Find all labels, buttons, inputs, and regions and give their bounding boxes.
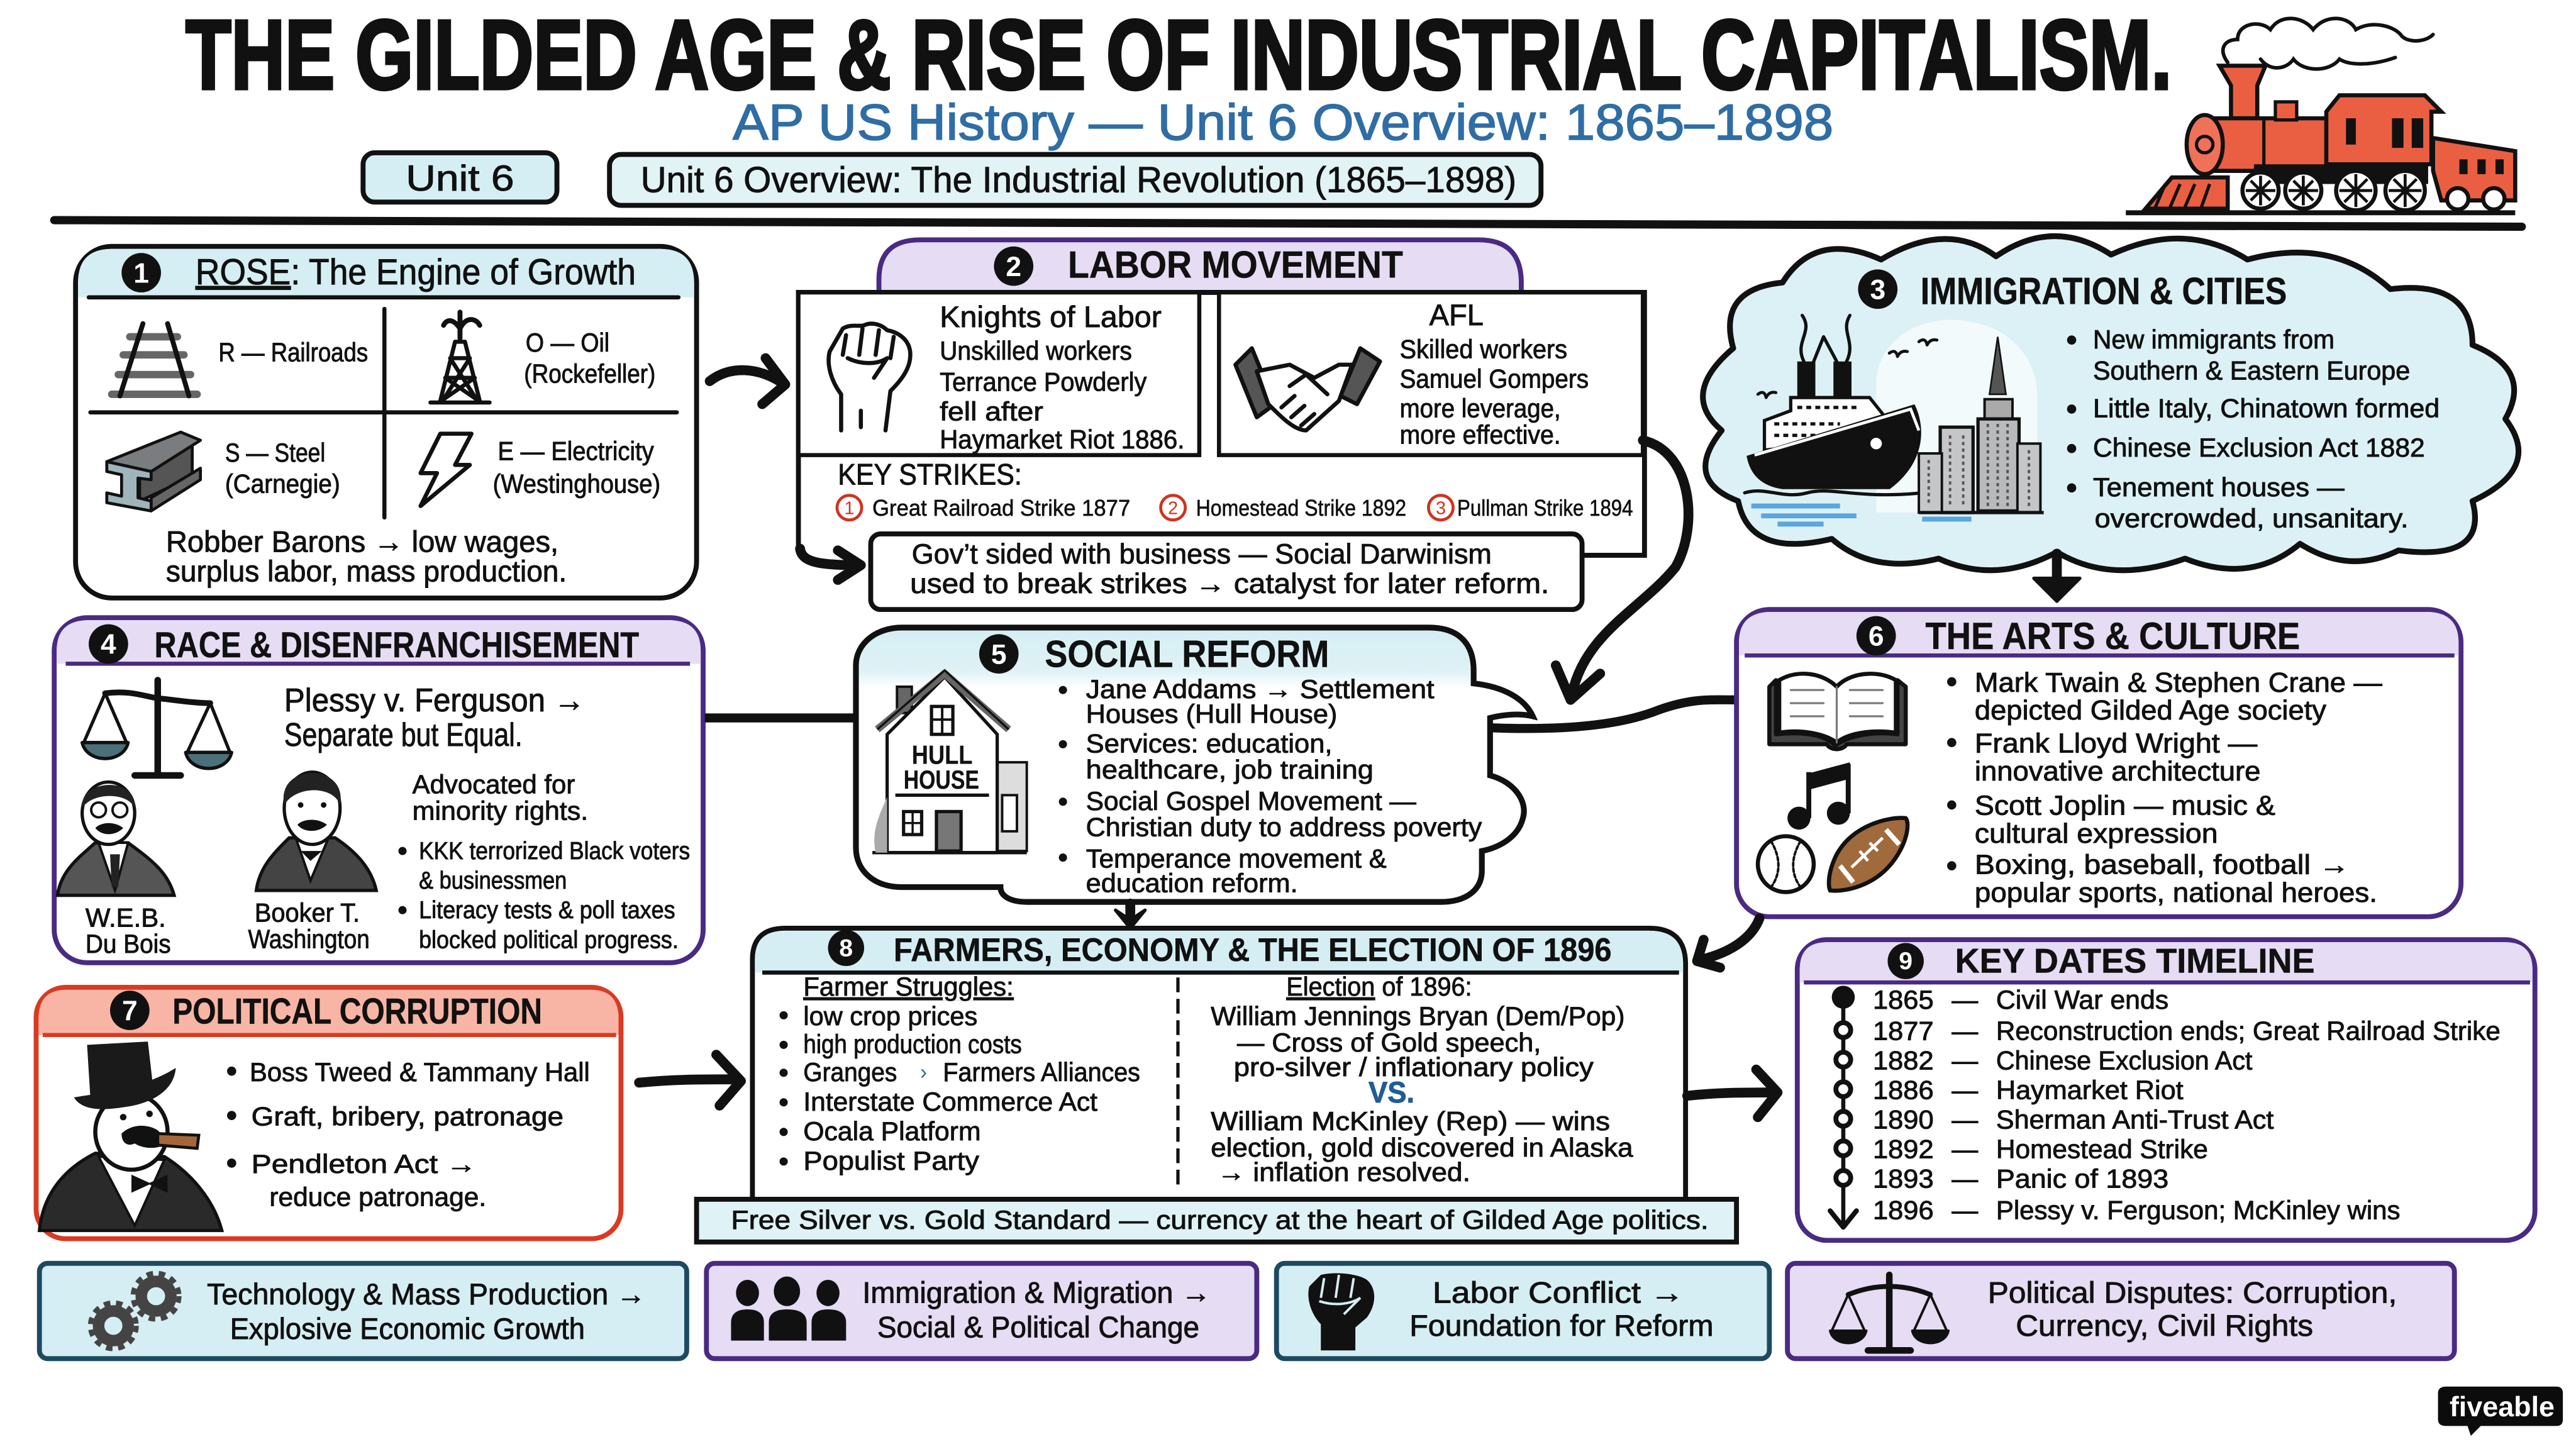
icon: Hull House: HOUSE [904,765,979,794]
panel 8: farmers, economy & election [752,928,1685,1208]
takeaway text [207,1277,646,1345]
arrow: labor box to callout [800,548,861,580]
advocated text: Advocated for [413,770,575,799]
election of 1896 column: election, gold discovered in Alaska [1211,1133,1633,1162]
badge 1 [121,253,161,292]
icon: oil derrick [430,312,489,402]
election of 1896 column: Election of 1896: [1286,972,1472,1001]
takeaway text: Currency, Civil Rights [2016,1309,2313,1342]
arts bullets: Mark Twain & Stephen Crane — [1975,668,2383,698]
election of 1896 column [1211,972,1633,1187]
heading: RACE & DISENFRANCHISEMENT [155,625,639,665]
arts bullets: Frank Lloyd Wright — [1975,728,2258,758]
election of 1896 column: — Cross of Gold speech, [1237,1028,1541,1057]
farmer struggles column: high production costs [803,1029,1022,1058]
icon: lightning bolt [421,434,472,506]
arts bullets: Boxing, baseball, football → [1975,850,2350,880]
plessy text: Plessy v. Ferguson → [284,682,585,719]
banner: free silver vs. gold [697,1199,1736,1242]
panel 2: labor movement [799,240,1645,609]
badge 2: 2 [1006,252,1021,282]
social reform bullets: healthcare, job training [1086,755,1374,784]
icon: railroad track [112,324,197,396]
takeaway: technology [40,1263,687,1358]
farmer struggles column [780,972,1140,1175]
icon: football [1829,818,1907,891]
knights of labor box [799,292,1199,455]
government callout: Gov’t sided with business — Social Darwinism [912,539,1492,570]
heading: LABOR MOVEMENT [1068,243,1403,286]
tag: unit overview: Unit 6 Overview: The Industrial Revolution (1865–1898) [641,160,1516,201]
header band [755,931,1683,972]
timeline entries [1873,985,2501,1224]
takeaway text: Foundation for Reform [1409,1309,1714,1342]
corruption bullets [227,1057,590,1211]
fiveable logo: fiveable [2450,1392,2555,1423]
heading: KEY DATES TIMELINE [1955,941,2315,980]
arts bullets: Scott Joplin — music & [1975,791,2275,821]
illustration: ship and skyline [1745,316,2044,524]
plessy text [284,682,585,753]
immigration bullets [2067,325,2440,533]
caption: W.E.B. Du Bois: W.E.B. [86,902,166,932]
timeline entries: — [1951,1016,1978,1046]
takeaway text: Social & Political Change [877,1310,1199,1343]
E electricity: (Westinghouse) [493,469,660,499]
badge 7: 7 [122,996,138,1026]
caption: W.E.B. Du Bois [86,902,171,958]
government callout [870,534,1582,609]
election of 1896 column: William Jennings Bryan (Dem/Pop) [1211,1001,1625,1031]
timeline entries: — [1951,1046,1978,1075]
badge 1: 1 [133,258,149,289]
arrow: farmers to timeline [1687,1070,1777,1117]
panel 6: arts & culture [1736,609,2461,917]
S steel [225,438,340,499]
farmer struggles column: › [920,1060,927,1084]
icon: scales of justice [82,680,231,775]
panel 9: key dates timeline [1797,940,2535,1240]
header tab [879,240,1521,292]
takeaway text: Labor Conflict → [1433,1276,1684,1309]
key strikes: Homestead Strike 1892 [1196,495,1406,521]
corruption bullets: reduce patronage. [269,1182,486,1211]
timeline entries: — [1951,1135,1978,1164]
robber barons text: Robber Barons → low wages, [166,525,558,558]
S steel: S — Steel [225,438,325,467]
icon: Boss Tweed caricature [40,1041,222,1231]
key strikes: 3 [1436,499,1446,519]
corruption bullets: Pendleton Act → [252,1149,477,1179]
icon: steel I-beam [107,432,201,511]
header band [78,249,694,297]
KKK and literacy bullets: KKK terrorized Black voters [419,838,690,865]
immigration bullets: Chinese Exclusion Act 1882 [2093,433,2425,462]
timeline entries: 1882 [1873,1046,1934,1075]
knights text: Knights of Labor [940,300,1162,333]
timeline entries: Sherman Anti-Trust Act [1996,1105,2274,1135]
election of 1896 column: pro-silver / inflationary policy [1234,1052,1594,1082]
E electricity [493,436,660,499]
S steel: (Carnegie) [225,469,340,499]
AFL text [1400,298,1589,449]
election of 1896 column: William McKinley (Rep) — wins [1211,1106,1610,1136]
timeline entries: Homestead Strike [1996,1135,2208,1164]
knights text [940,300,1184,454]
takeaway text [1409,1276,1714,1342]
arrow: ROSE to labor [709,358,786,404]
key strikes: 2 [1168,499,1178,519]
key strikes: 1 [845,499,855,519]
KKK and literacy bullets: Literacy tests & poll taxes [419,897,675,924]
AFL box [1219,292,1643,455]
arrow: social reform to farmers [1116,904,1145,928]
government callout: used to break strikes → catalyst for later reform. [910,569,1549,599]
timeline entries: 1886 [1873,1075,1934,1105]
takeaway text: Technology & Mass Production → [207,1277,646,1311]
KKK and literacy bullets: & businessmen [419,867,567,894]
timeline axis [1830,985,1857,1227]
KKK and literacy bullets: blocked political progress. [419,926,679,953]
tag: Unit 6: Unit 6 [406,158,514,199]
heading: IMMIGRATION & CITIES [1921,270,2287,312]
badge 2 [994,247,1033,286]
takeaway text [862,1276,1211,1343]
icon: music notes [1787,762,1850,830]
farmer struggles column: Populist Party [803,1146,979,1175]
plessy text: Separate but Equal. [284,717,523,753]
social reform bullets: Christian duty to address poverty [1086,813,1482,842]
panel 5: social reform [856,628,1533,902]
AFL text: Samuel Gompers [1400,364,1589,393]
speech-cloud shape [856,628,1533,902]
timeline entries: — [1951,1105,1978,1135]
header band [57,620,701,663]
immigration bullets: Tenement houses — [2093,472,2345,502]
badge 8: 8 [839,935,853,962]
heading: FARMERS, ECONOMY & THE ELECTION OF 1896 [894,932,1612,969]
corruption bullets: Boss Tweed & Tammany Hall [250,1057,590,1087]
farmer struggles column: Ocala Platform [803,1116,981,1146]
portrait: Booker T. Washington [257,772,376,891]
key strikes: KEY STRIKES: [838,458,1022,491]
timeline entries: 1892 [1873,1135,1934,1164]
arrow: corruption to farmers [639,1055,741,1106]
timeline entries: 1890 [1873,1105,1934,1135]
immigration bullets: Southern & Eastern Europe [2093,355,2410,385]
farmer struggles column: Interstate Commerce Act [803,1087,1097,1116]
R railroads: R — Railroads [218,338,368,367]
immigration bullets: overcrowded, unsanitary. [2095,504,2409,533]
timeline entries: 1896 [1873,1195,1934,1224]
cloud shape [1703,236,2519,570]
timeline entries: 1865 [1873,985,1934,1014]
knights text: Unskilled workers [940,336,1132,365]
takeaway text: Political Disputes: Corruption, [1988,1276,2397,1309]
timeline entries: — [1951,1164,1978,1194]
panel 4: race & disenfranchisement [54,618,703,963]
takeaway text: Immigration & Migration → [862,1276,1211,1309]
immigration bullets: New immigrants from [2093,325,2334,354]
takeaway: immigration [706,1263,1257,1358]
arrow: labor to social reform [1556,440,1689,700]
O oil: (Rockefeller) [524,359,655,389]
AFL text: more effective. [1400,419,1561,449]
timeline entries: Panic of 1893 [1996,1164,2168,1194]
badge 3 [1858,269,1897,309]
icon: raised fist [829,324,910,430]
header band [1800,942,2533,982]
heading: POLITICAL CORRUPTION [172,991,542,1031]
caption: W.E.B. Du Bois: Du Bois [86,929,171,958]
timeline entries: — [1951,985,1978,1014]
icon: open book [1769,674,1906,749]
timeline entries: Plessy v. Ferguson; McKinley wins [1996,1195,2400,1224]
badge 4: 4 [101,630,116,660]
tag: Unit 6 [363,153,557,202]
icon: fist [1308,1273,1374,1350]
farmer struggles column: Farmer Struggles: [803,972,1014,1001]
heading: ROSE: The Engine of Growth [196,252,636,292]
subtitle: AP US History — Unit 6 Overview: 1865–1898 [733,94,1833,151]
header band [1739,612,2458,655]
timeline entries: Reconstruction ends; Great Railroad Strike [1996,1016,2501,1046]
arrow: arts to farmers [1697,918,1760,968]
timeline entries: Chinese Exclusion Act [1996,1046,2253,1075]
icon: gears [91,1273,179,1349]
social reform bullets: Jane Addams → Settlement [1086,674,1435,704]
badge 9: 9 [1899,948,1913,975]
AFL text: AFL [1430,298,1484,331]
E electricity: E — Electricity [498,436,654,465]
icon: Hull House [872,670,1027,853]
header band [38,990,619,1035]
arts bullets: popular sports, national heroes. [1975,878,2377,908]
AFL text: more leverage, [1400,394,1561,423]
fiveable logo [2438,1387,2563,1436]
timeline entries: 1893 [1873,1164,1934,1194]
caption: Booker T. Washington: Washington [248,924,370,953]
icon: Hull House: HULL [912,740,972,770]
election of 1896 column: VS. [1368,1075,1414,1109]
arts bullets: innovative architecture [1975,757,2260,787]
knights text: Haymarket Riot 1886. [940,425,1184,454]
corruption bullets: Graft, bribery, patronage [252,1101,564,1131]
badge 4 [89,625,128,663]
badge 7 [110,991,150,1030]
takeaway text: Explosive Economic Growth [230,1312,585,1345]
farmer struggles column: Farmers Alliances [943,1057,1140,1087]
heading: THE ARTS & CULTURE [1926,615,2300,657]
social reform bullets: education reform. [1086,868,1298,897]
arts bullets [1947,668,2383,908]
arrow: immigration to arts [2034,553,2080,601]
badge 6: 6 [1868,621,1884,652]
banner: free silver vs. gold: Free Silver vs. Gold Standard — currency at the heart of Gilded Age politics. [731,1205,1709,1235]
badge 9 [1887,943,1924,979]
farmer struggles column: Granges [803,1057,897,1087]
AFL text: Skilled workers [1400,334,1567,364]
badge 8 [828,930,864,966]
takeaway text [1988,1276,2397,1342]
O oil [524,328,655,389]
election of 1896 column: → inflation resolved. [1218,1157,1470,1187]
social reform bullets [1059,674,1482,897]
portrait: W.E.B. Du Bois [57,782,174,896]
caption: Booker T. Washington: Booker T. [255,897,360,927]
caption: Booker T. Washington [248,897,370,953]
arts bullets: depicted Gilded Age society [1975,696,2326,726]
farmer struggles column: low crop prices [803,1001,977,1031]
badge 6 [1857,616,1896,655]
panel 3: immigration & cities [1703,236,2519,570]
badge 3: 3 [1870,274,1885,305]
arts bullets: cultural expression [1975,819,2218,849]
knights text: fell after [940,397,1043,426]
icon: people [731,1277,846,1341]
social reform bullets: Social Gospel Movement — [1086,786,1416,816]
takeaway: political disputes [1787,1263,2455,1358]
takeaway: labor conflict [1277,1263,1769,1358]
timeline entries: 1877 [1873,1016,1934,1046]
social reform bullets: Temperance movement & [1086,843,1387,873]
knights text: Terrance Powderly [940,367,1146,397]
social reform bullets: Services: education, [1086,728,1333,758]
icon: steam train [2126,18,2515,213]
KKK and literacy bullets [398,838,690,953]
advocated text: minority rights. [413,796,588,826]
panel 7: political corruption [36,987,621,1239]
badge 5 [979,634,1019,674]
immigration bullets: Little Italy, Chinatown formed [2093,394,2440,423]
icon: handshake [1235,348,1380,430]
social reform bullets: Houses (Hull House) [1086,699,1337,728]
robber barons text [166,525,567,588]
timeline entries: Civil War ends [1996,985,2168,1014]
key strikes [837,458,1633,521]
robber barons text: surplus labor, mass production. [166,555,567,588]
O oil: O — Oil [526,328,609,357]
icon: baseball [1758,836,1814,892]
timeline entries: Haymarket Riot [1996,1075,2184,1105]
key strikes: Pullman Strike 1894 [1457,495,1633,521]
heading: SOCIAL REFORM [1045,633,1329,675]
badge 5: 5 [991,639,1007,670]
advocated text [413,770,588,826]
icon: scales [1830,1275,1948,1350]
timeline entries: — [1951,1195,1978,1224]
key strikes: Great Railroad Strike 1877 [872,495,1130,521]
timeline entries: — [1951,1075,1978,1105]
panel 1: ROSE [75,247,697,598]
